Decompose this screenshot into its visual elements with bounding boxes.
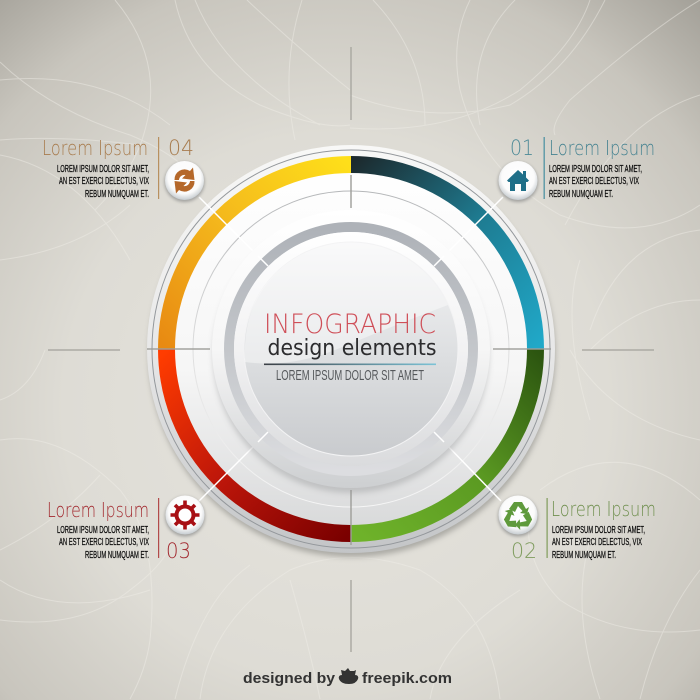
number: 04 — [168, 136, 194, 160]
body text: REBUM NUMQUAM ET. — [549, 188, 613, 200]
icon: house — [498, 161, 538, 202]
thin rim line — [152, 150, 550, 548]
title: infographic: INFOGRAPHIC — [264, 309, 436, 340]
heading: Lorem Ipsum — [549, 136, 655, 160]
centre disc — [244, 242, 458, 456]
connector lines — [199, 197, 503, 501]
ring segment: teal — [351, 164, 536, 349]
icon: gear — [165, 496, 205, 536]
subtitle: design elements: design elements — [268, 336, 436, 361]
icon: recycle — [498, 496, 538, 536]
tagline: LOREM IPSUM DOLOR SIT AMET — [276, 367, 424, 384]
plate dividers — [147, 175, 551, 545]
icon: refresh arrows — [164, 161, 204, 202]
credit: designed by freepik.com: freepik.com — [362, 670, 452, 687]
ring segment: red — [166, 349, 351, 534]
body text: LOREM IPSUM DOLOR SIT AMET, — [57, 163, 149, 175]
thin inner circle — [193, 191, 509, 507]
stepped disc shadow — [213, 217, 489, 493]
centre title — [264, 309, 436, 384]
divider — [158, 137, 159, 199]
body text: AN EST EXERCI DELECTUS, VIX — [59, 536, 149, 548]
body text — [552, 524, 645, 561]
divider — [546, 498, 548, 558]
outer rim — [147, 145, 555, 553]
white band — [234, 232, 468, 466]
body text: REBUM NUMQUAM ET. — [552, 549, 616, 561]
stepped disc — [212, 210, 490, 488]
body text — [57, 524, 149, 561]
number: 02 — [511, 539, 537, 563]
icon: freepik logo — [339, 668, 358, 684]
title rule — [264, 364, 436, 365]
body text: REBUM NUMQUAM ET. — [85, 549, 149, 561]
callout 02 — [498, 496, 656, 563]
callout 04 — [42, 136, 204, 202]
divider — [544, 137, 545, 199]
crosshair lines — [48, 47, 654, 652]
number: 03 — [166, 539, 191, 563]
credit: designed by freepik.com: designed by — [243, 670, 336, 687]
ring segment: green — [351, 349, 536, 534]
dial shadow — [149, 151, 555, 557]
body text: LOREM IPSUM DOLOR SIT AMET, — [57, 524, 149, 536]
heading: Lorem Ipsum — [551, 497, 656, 521]
callout 01 — [498, 136, 655, 202]
white plate — [158, 156, 544, 542]
main dial — [147, 145, 555, 557]
body text — [57, 163, 149, 200]
body text: AN EST EXERCI DELECTUS, VIX — [59, 175, 149, 187]
number: 01 — [510, 136, 534, 160]
ring gaps — [258, 256, 444, 442]
credit: designed by freepik.com — [243, 668, 452, 687]
divider — [158, 498, 159, 558]
grey ring — [229, 227, 473, 471]
heading: Lorem Ipsum — [47, 498, 149, 522]
heading: Lorem Ipsum — [42, 136, 148, 160]
body text — [549, 163, 642, 200]
centre disc highlight — [245, 242, 448, 364]
callout 03 — [47, 496, 205, 563]
ring segment: yellow — [166, 164, 351, 349]
body text: REBUM NUMQUAM ET. — [85, 188, 149, 200]
